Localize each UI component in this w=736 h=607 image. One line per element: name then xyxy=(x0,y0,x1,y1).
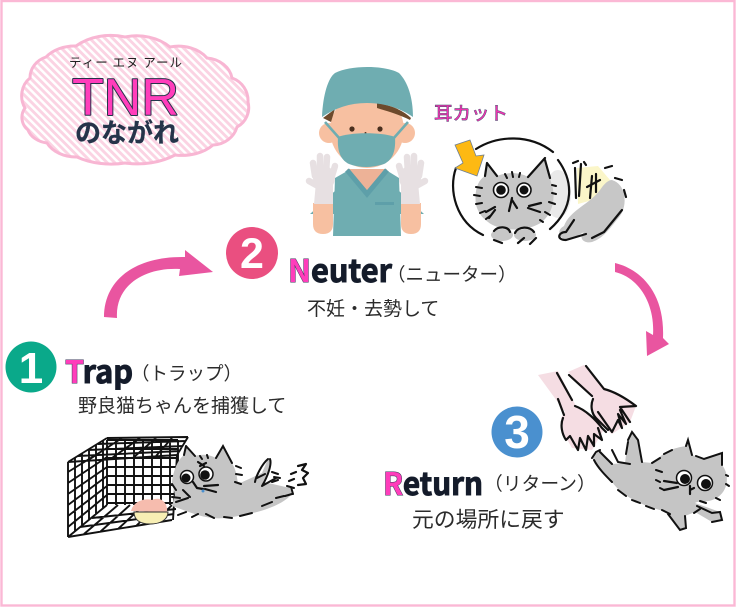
badge 2 xyxy=(226,227,278,279)
badge 3 xyxy=(492,406,542,458)
title cloud badge xyxy=(22,35,249,164)
hind body xyxy=(559,180,625,242)
cage wire xyxy=(68,437,188,537)
heading: Neuter xyxy=(288,246,517,291)
paws and body lines xyxy=(494,227,536,244)
speed marks xyxy=(289,464,308,485)
arrow 1 to 2 xyxy=(104,250,213,318)
arms xyxy=(313,203,421,234)
badge 3: 3 xyxy=(504,406,530,458)
title subtitle: のながれ xyxy=(75,113,179,150)
sleeves xyxy=(310,190,424,214)
Neuter reading: （ニューター） xyxy=(387,261,517,287)
heading: Return xyxy=(383,459,596,504)
Return reading: （リターン） xyxy=(484,469,596,496)
cat face lines xyxy=(193,462,218,492)
bandage xyxy=(577,166,610,204)
drool xyxy=(202,490,204,492)
nose and whiskers xyxy=(486,198,541,218)
left hand xyxy=(538,371,603,450)
illustration: hands releasing cat xyxy=(538,365,729,530)
cone outline xyxy=(453,138,569,235)
food bowl xyxy=(131,499,167,512)
mask xyxy=(325,122,408,139)
cat outline xyxy=(172,446,294,518)
cat eyes xyxy=(676,470,692,486)
heading: Trap xyxy=(65,347,242,392)
illustration: cat with cone xyxy=(453,138,626,244)
Return description: 元の場所に戻す xyxy=(412,503,565,534)
cat eyes xyxy=(180,470,194,484)
cat outline xyxy=(592,432,729,530)
icon: yellow arrow to ear xyxy=(455,140,484,176)
Trap reading: （トラップ） xyxy=(131,360,242,386)
eyes xyxy=(349,126,355,132)
cat body xyxy=(592,432,727,530)
Trap description: 野良猫ちゃんを捕獲して xyxy=(78,391,286,418)
badge 1 xyxy=(6,342,56,393)
heading: Trap: Trap xyxy=(65,347,133,392)
ears and fur xyxy=(485,158,550,178)
glove right xyxy=(399,156,425,204)
badge 2: 2 xyxy=(240,230,264,278)
cone shading xyxy=(545,170,571,218)
face xyxy=(330,92,404,168)
ears xyxy=(319,123,339,143)
title TNR: TNR xyxy=(72,69,179,127)
cat body xyxy=(172,446,292,518)
title reading: ティー エヌ アール xyxy=(69,52,182,71)
ear cut label: 耳カット xyxy=(434,100,508,126)
eyes xyxy=(494,182,508,198)
heading: Neuter: Neuter xyxy=(288,246,392,291)
glove left xyxy=(309,156,335,204)
scrubs body xyxy=(333,170,401,236)
hand lines xyxy=(557,366,636,450)
hair xyxy=(323,103,411,122)
cap xyxy=(322,67,413,117)
right hand xyxy=(568,365,636,434)
cat face lines xyxy=(664,481,694,494)
front paws xyxy=(491,229,513,241)
icon: surgeon xyxy=(309,67,425,236)
illustration: cage and cat xyxy=(68,437,308,537)
badge 1: 1 xyxy=(19,344,43,393)
heading: Return: Return xyxy=(383,459,483,504)
arrow 2 to 3 xyxy=(615,263,669,356)
head xyxy=(475,158,554,230)
Neuter description: 不妊・去勢して xyxy=(307,294,439,321)
